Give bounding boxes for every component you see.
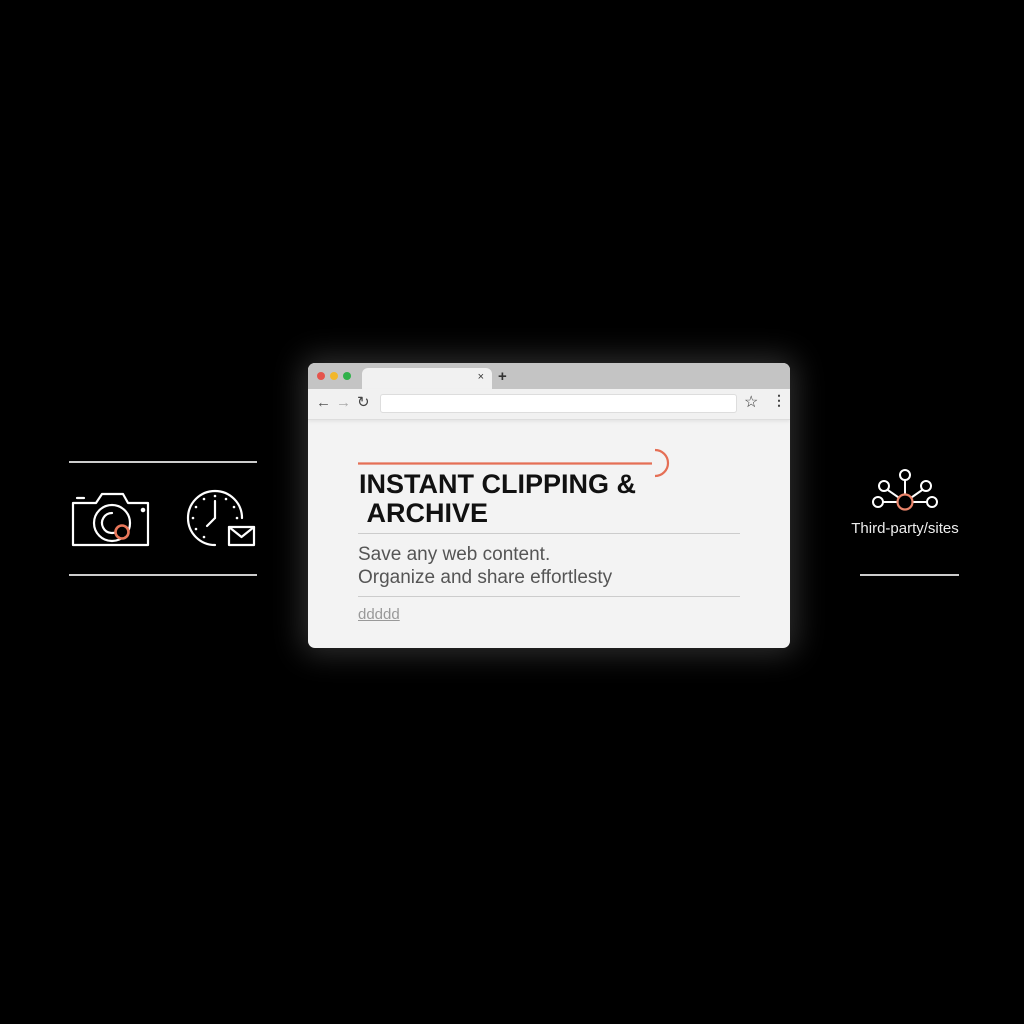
toolbar: ☆ [744, 394, 758, 411]
tab bar: + [498, 368, 507, 385]
toolbar: → [336, 394, 351, 411]
label: Third-party/sites [851, 520, 959, 537]
tab bar: × [478, 371, 484, 383]
heading: ARCHIVE [366, 498, 488, 528]
subtext: Save any web content. [358, 544, 550, 565]
subtext: Organize and share effortlesty [358, 567, 612, 588]
toolbar: ⋮ [772, 392, 786, 408]
link: ddddd [358, 606, 400, 623]
icon: camera [72, 492, 150, 546]
right panel: third-party sites [851, 469, 959, 576]
icon: clock with mail [186, 490, 256, 546]
left divider lines and icons panel [69, 461, 257, 576]
toolbar: ← [316, 394, 331, 411]
toolbar: ↻ [357, 394, 370, 411]
heading: INSTANT CLIPPING & [359, 469, 636, 499]
heading [359, 469, 636, 528]
tab bar [308, 363, 790, 389]
subtext [358, 544, 612, 588]
orange accent line [358, 448, 670, 478]
browser window [308, 363, 790, 648]
icon: network [872, 469, 938, 511]
toolbar [308, 389, 790, 420]
